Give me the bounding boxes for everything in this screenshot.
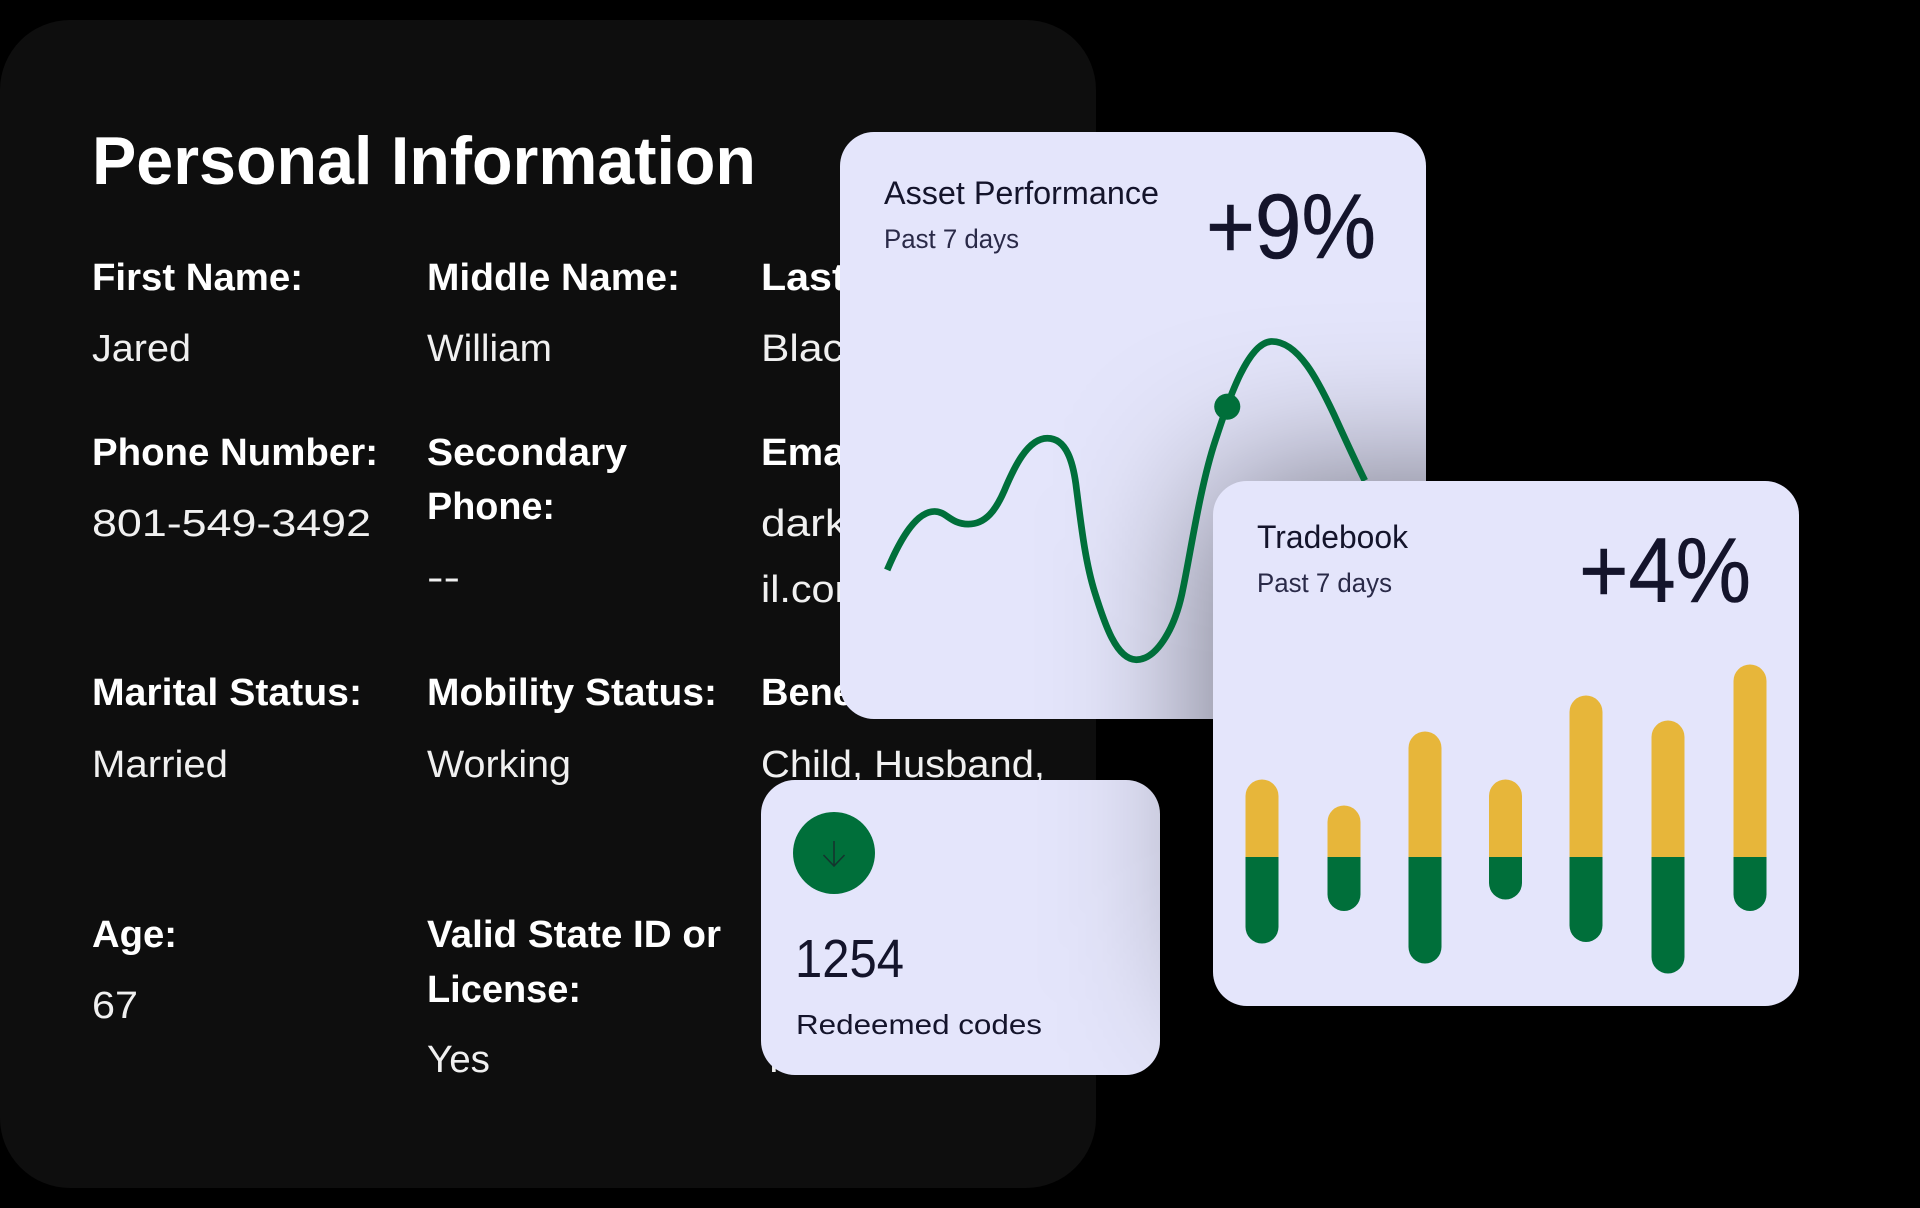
field: phone number: Phone Number: [92,432,378,474]
field: email [761,432,881,611]
stat number: 1254 [795,929,904,989]
field: valid state id: Valid State ID or [427,914,721,956]
field: middle name: Middle Name: [427,257,680,299]
icon: download arrow [793,812,875,894]
field: mobility status: Working [427,744,571,786]
field: email: dark [761,503,848,545]
field: valid state id: License: [427,969,581,1011]
field: mobility status: Mobility Status: [427,672,717,714]
card: redeemed codes [761,780,1160,1075]
field: beneficiary: Child, Husband, [761,744,1045,786]
field: phone number [92,432,378,545]
field: last name [761,257,983,370]
field: last name: Last Name: [761,257,983,299]
field: last name: Black [761,328,866,370]
field: secondary phone: -- [427,557,460,599]
field: email: il.com [761,569,869,611]
field: marital status [92,672,362,786]
stat label: Redeemed codes [796,1009,1042,1040]
big number: +4% [1579,520,1751,622]
bar chart [1246,664,1766,974]
field: valid state id [427,914,721,1081]
heading: Personal Information [92,123,756,199]
field: email: Email: [761,432,881,474]
big number: +9% [1206,176,1376,278]
field: age: Age: [92,914,177,956]
field: first name: First Name: [92,257,303,299]
field: age: 67 [92,985,138,1027]
field: mobility status [427,672,717,786]
card subtitle: Past 7 days [1257,568,1392,598]
card: tradebook [1213,481,1799,1006]
field value hidden behind card: Yes [761,1039,824,1081]
field: marital status: Married [92,744,228,786]
card title: Tradebook [1257,519,1409,555]
card subtitle: Past 7 days [884,224,1019,254]
field: first name [92,257,303,370]
field: beneficiary: Beneficiary: [761,672,979,714]
field: secondary phone: Phone: [427,486,555,528]
field: marital status: Marital Status: [92,672,362,714]
card title: Asset Performance [884,175,1159,211]
line chart [887,341,1365,660]
field: secondary phone: Secondary [427,432,627,474]
field: middle name [427,257,680,370]
field: first name: Jared [92,328,191,370]
field: beneficiary [761,672,1045,786]
field: valid state id: Yes [427,1039,490,1081]
card: asset performance [840,132,1426,719]
field: middle name: William [427,328,552,370]
field: age [92,914,177,1027]
panel: personal information [0,20,1096,1188]
field: phone number: 801-549-3492 [92,503,371,545]
field: secondary phone [427,432,627,599]
